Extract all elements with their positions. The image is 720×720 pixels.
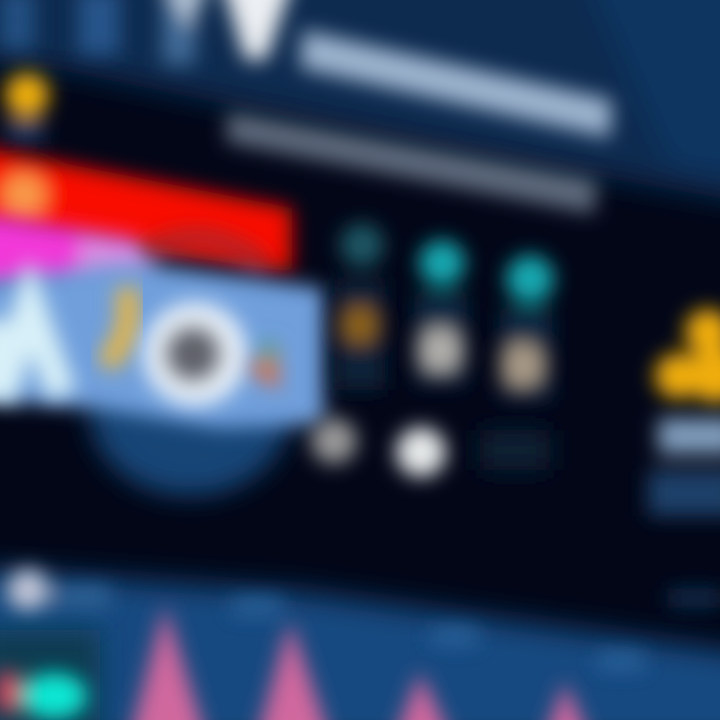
icon: yellow figure [105, 288, 129, 365]
chart: pink peaks [128, 605, 592, 720]
text block: bottom chart label [7, 569, 720, 611]
icon: gauge marker [248, 342, 278, 390]
panel: light blue gauge card [0, 238, 324, 428]
panel: top header [0, 0, 720, 205]
panel: bottom-left dark card [0, 630, 100, 720]
text block: faint column note [480, 430, 550, 470]
icon: teal status [0, 670, 87, 719]
text block: right stat [648, 418, 720, 516]
icon: white arc letters [0, 305, 62, 400]
text block: chart tick labels [232, 598, 644, 669]
heading: title [300, 30, 612, 138]
icon: white dot [396, 427, 446, 477]
text block: subtitle [226, 112, 597, 214]
panel: metric column one [335, 223, 385, 390]
icon: yellow badge [5, 73, 49, 144]
icon: yellow cluster [655, 309, 720, 403]
panel: bottom chart band [0, 568, 720, 720]
heading: top-left title glyphs [0, 0, 295, 65]
chart: dark semicircle gauge base [90, 328, 290, 496]
panel: magenta band [0, 212, 150, 296]
panel: metric column three [500, 255, 554, 400]
panel: metric column two [415, 240, 467, 385]
panel: red band [0, 145, 292, 272]
icon: grey dot [311, 418, 357, 464]
chart: circular gauge [143, 302, 247, 406]
